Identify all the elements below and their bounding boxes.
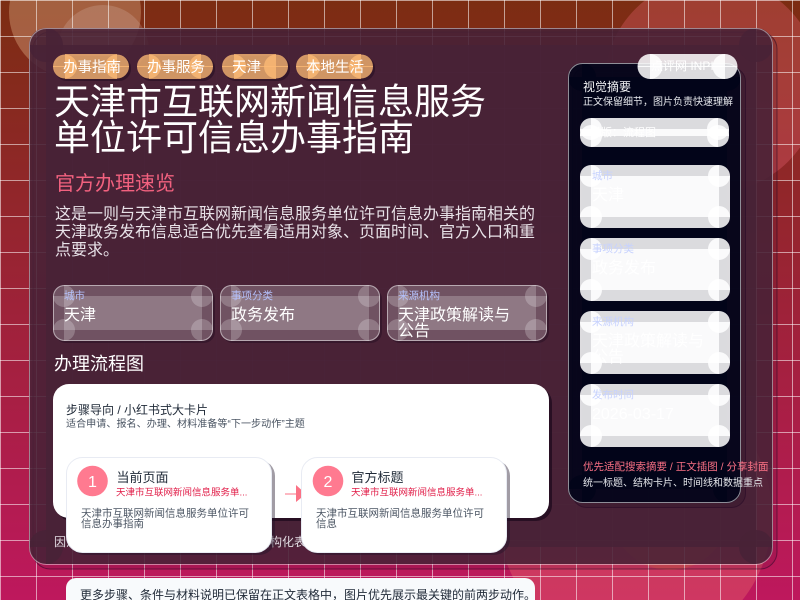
metric card: 事项分类 (220, 285, 382, 343)
side card: template: 模版：流程图 (590, 125, 656, 139)
step card 1: 天津市互联网新闻信息服务单... (116, 486, 247, 498)
tag: 办事服务: 办事服务 (147, 59, 205, 76)
section heading: 办理流程图: 办理流程图 (54, 354, 144, 374)
side pill (638, 54, 738, 79)
metric card: 事项分类: 事项分类 (231, 289, 273, 302)
step card 2: 天津市互联网新闻信息服务单... (351, 486, 482, 498)
intro paragraph: 点要求。 (55, 241, 119, 259)
side card: 来源机构: 天津政策解读与 (592, 332, 704, 350)
metric card: 来源机构 (387, 285, 549, 343)
intro paragraph: 这是一则与天津市互联网新闻信息服务单位许可信息办事指南相关的 (55, 205, 535, 223)
side card: 城市 (580, 165, 730, 228)
step card 1: 信息办事指南 (81, 517, 144, 530)
step card 2 (302, 458, 510, 555)
bottom note card (66, 578, 536, 600)
side card: template (580, 118, 729, 147)
flow chart card: 适合申请、报名、办理、材料准备等“下一步动作”主题 (66, 417, 305, 430)
side card: 来源机构 (580, 311, 730, 374)
subtitle: 官方办理速览 (55, 172, 175, 195)
side pill: 点评网 INPI (651, 59, 714, 73)
side card: 事项分类: 事项分类 (592, 242, 634, 255)
intro paragraph: 天津政务发布信息适合优先查看适用对象、页面时间、官方入口和重 (55, 223, 535, 241)
side card: 来源机构: 公告 (592, 348, 624, 366)
side heading: 视觉摘要 (583, 79, 631, 94)
step card 2: 官方标题 (352, 470, 404, 485)
tag: 办事指南: 办事指南 (63, 59, 121, 76)
metric card: 来源机构: 来源机构 (398, 289, 440, 302)
step card 1: 1 (88, 474, 97, 491)
side card: 城市: 天津 (592, 186, 624, 204)
title: 单位许可信息办事指南 (54, 117, 414, 158)
side card: 发布时间: 2026-03-17 (592, 406, 674, 423)
metric card: 城市: 天津 (64, 306, 96, 324)
step card 1: 当前页面 (116, 470, 169, 485)
tag: 本地生活: 本地生活 (306, 59, 364, 76)
side caption: 统一标题、结构卡片、时间线和数据重点 (583, 476, 763, 489)
side highlight line: 优先适配搜索摘要 / 正文插图 / 分享封面 (583, 460, 769, 473)
tag: 办事服务 (137, 54, 215, 81)
step card 1: 天津市互联网新闻信息服务单位许可 (81, 506, 249, 520)
metric card: 城市: 城市 (64, 289, 85, 302)
side card: 发布时间 (580, 384, 730, 447)
metric card: 城市 (53, 285, 215, 343)
tag: 天津 (222, 54, 290, 81)
step card 2: 信息 (316, 517, 337, 530)
tag: 办事指南 (53, 54, 131, 81)
metric card: 来源机构: 天津政策解读与 (398, 306, 510, 324)
side card: 事项分类 (580, 238, 730, 301)
step card 1 (66, 458, 275, 555)
metric card: 事项分类: 政务发布 (231, 306, 295, 324)
tag: 天津: 天津 (232, 59, 261, 76)
metric card: 来源机构: 公告 (398, 322, 430, 340)
arrow between steps (285, 485, 306, 502)
step card 2: 天津市互联网新闻信息服务单位许可 (316, 506, 484, 520)
tag: 本地生活 (296, 54, 375, 81)
side card: 事项分类: 政务发布 (592, 259, 656, 277)
side panel: visual summary (568, 54, 769, 508)
side card: 发布时间: 发布时间 (592, 388, 634, 401)
side subheading: 正文保留细节，图片负责快速理解 (583, 95, 733, 108)
title: 天津市互联网新闻信息服务 (54, 81, 486, 122)
flow chart card: 步骤导向 / 小红书式大卡片 (66, 402, 208, 417)
footnote behind step cards: 因流程步骤较多，完整内容已同步整理结构化表格 (54, 534, 318, 549)
side card: 城市: 城市 (592, 169, 613, 182)
step card 2: 2 (324, 474, 333, 491)
flow chart card (53, 384, 552, 521)
side card: 来源机构: 来源机构 (592, 315, 634, 328)
